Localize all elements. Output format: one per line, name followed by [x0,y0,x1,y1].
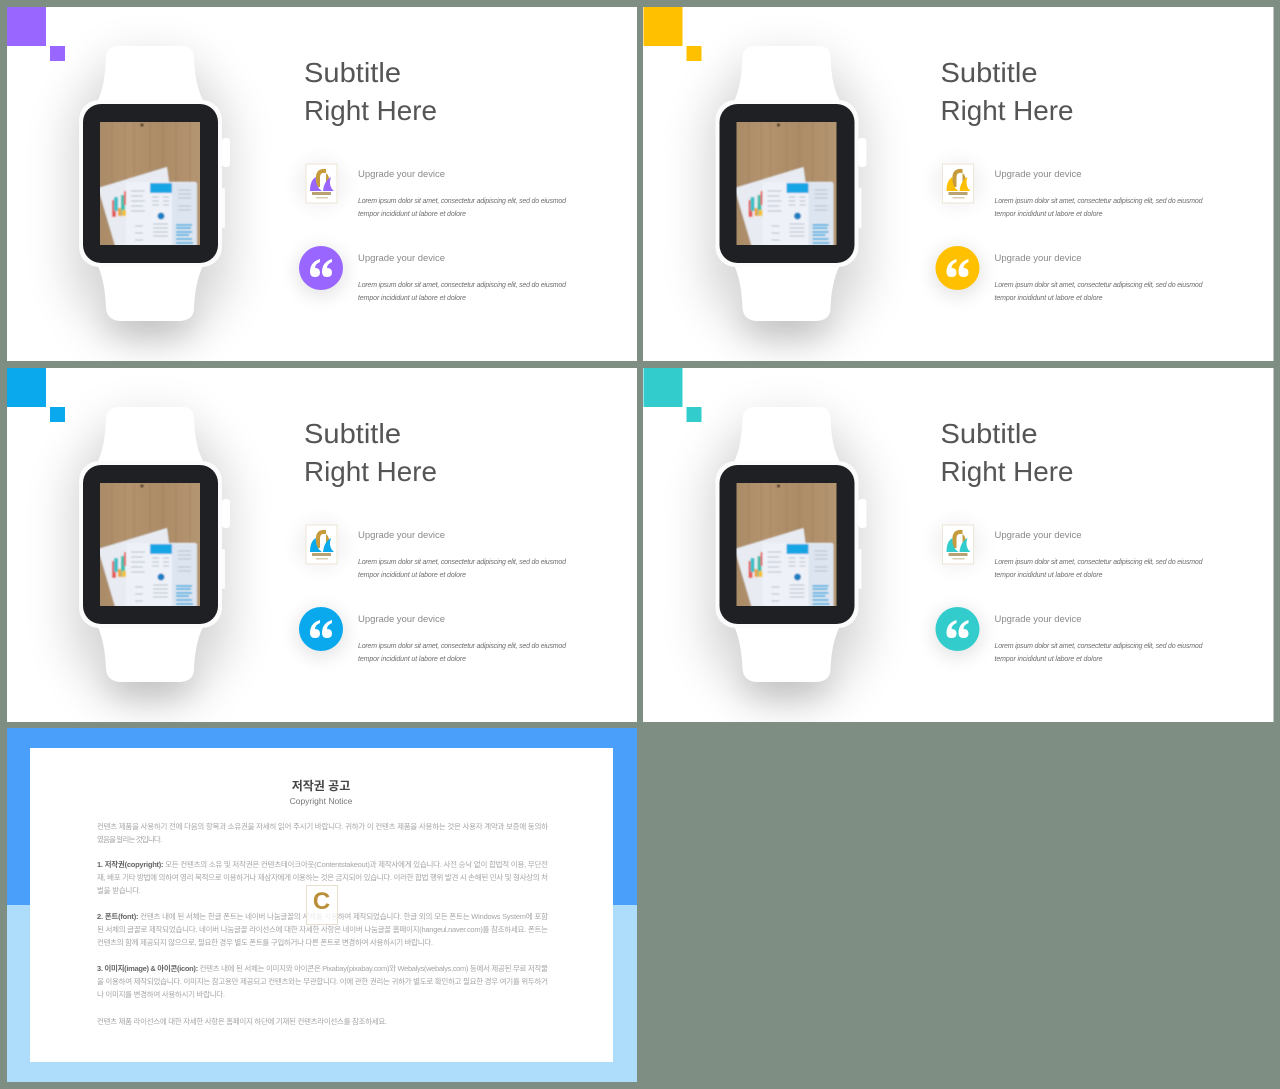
feature text 1 [358,530,567,579]
intro text [97,821,548,844]
intro text: 컨텐츠 제품을 사용하기 전에 다음의 항목과 소유권을 자세히 읽어 주시기 바랍니다. 귀하가 이 컨텐츠 제품을 사용하는 것은 사용자 계약과 보증에 동의하 [97,821,548,831]
icon: logo badge [306,164,337,203]
feature text 1: Lorem ipsum dolor sit amet, consectetur adipiscing elit, sed do eiusmod [358,198,567,205]
icon: gold C logo: C [313,888,330,915]
feature text 1 [994,169,1204,218]
heading: Subtitle [940,57,1038,88]
feature text 1: Upgrade your device [358,530,445,541]
icon: logo badge [942,525,974,564]
feature text 2: tempor incididunt ut labore et dolore [358,295,466,302]
heading [304,418,437,487]
icon: quote circle [936,607,980,651]
heading: Subtitle [940,418,1038,449]
feature text 1: Lorem ipsum dolor sit amet, consectetur adipiscing elit, sed do eiusmod [994,559,1204,566]
feature text 2 [994,253,1204,302]
panel: copyright notice [7,728,637,1082]
copyright title: 저작권 공고 [292,778,350,793]
icon: gold C logo [306,886,338,924]
accent squares [7,368,65,422]
icon: quote circle [936,246,980,290]
section 1 [97,859,548,895]
heading: Subtitle [304,57,401,88]
intro text: 였음을 알리는 것입니다. [97,834,162,844]
section 3 [97,963,548,999]
feature text 1: Upgrade your device [994,169,1082,180]
section 2: 된 서체의 글꼴로 제작되었습니다. 네이버 나눔글꼴 라이선스에 대한 자세한 사항은 네이버 나눔글꼴 홈페이지(hangeul.naver.com)를 참조하세요. 폰트는 [97,924,548,934]
feature text 2: Upgrade your device [358,253,445,264]
heading: Subtitle [304,418,401,449]
panel: purple slide [7,7,637,361]
section 2 [97,911,548,947]
feature text 2: tempor incididunt ut labore et dolore [994,656,1103,663]
icon: quote circle [299,607,343,651]
feature text 2: tempor incididunt ut labore et dolore [994,295,1103,302]
feature text 2: Upgrade your device [994,614,1082,625]
feature text 2: Lorem ipsum dolor sit amet, consectetur adipiscing elit, sed do eiusmod [994,643,1204,650]
feature text 2 [994,614,1204,663]
heading: Right Here [304,456,437,487]
icon: logo badge [942,164,974,203]
feature text 1: tempor incididunt ut labore et dolore [994,572,1103,579]
feature text 2: Lorem ipsum dolor sit amet, consectetur adipiscing elit, sed do eiusmod [994,282,1204,289]
heading: Right Here [304,95,437,126]
accent squares [7,7,65,61]
heading [304,57,437,126]
feature text 1: tempor incididunt ut labore et dolore [358,572,466,579]
feature text 1: tempor incididunt ut labore et dolore [994,211,1103,218]
section 1: 벌을 받습니다. [97,885,141,895]
feature text 1 [358,169,567,218]
section 2: 컨텐츠의 함께 제공되지 않으므로, 필요한 경우 별도 폰트를 구입하거나 다른 폰트로 변경하여 사용하시기 바랍니다. [97,937,433,947]
feature text 2: Lorem ipsum dolor sit amet, consectetur adipiscing elit, sed do eiusmod [358,282,567,289]
heading [940,57,1074,126]
feature text 2: Upgrade your device [994,253,1082,264]
feature text 2: Upgrade your device [358,614,445,625]
section 3: 3. 이미지(image) & 아이콘(icon): 컨텐츠 내에 된 서체는 이미지와 아이콘은 Pixabay(pixabay.com)와 Webalys(webalys.com) 등에서 제공된 무료 저작물 [97,963,548,973]
feature text 1: Lorem ipsum dolor sit amet, consectetur adipiscing elit, sed do eiusmod [358,559,567,566]
section 3: 나 이미지를 변경하여 사용하시기 바랍니다. [97,989,225,999]
feature text 1 [994,530,1204,579]
panel: yellow slide [643,7,1274,361]
feature text 1: tempor incididunt ut labore et dolore [358,211,466,218]
feature text 1: Lorem ipsum dolor sit amet, consectetur adipiscing elit, sed do eiusmod [994,198,1204,205]
section 1: 재, 배포 기타 방법에 의하여 영리 목적으로 이용하거나 제삼자에게 이용하는 것은 금지되어 있습니다. 이러한 합법 행위 발견 시 손해된 민사 및 형사상의 처 [97,872,548,882]
feature text 2 [358,614,567,663]
closing line: 컨텐츠 제품 라이선스에 대한 자세한 사항은 홈페이지 하단에 기재된 컨텐츠라이선스를 참조하세요. [97,1016,387,1026]
section 2: 2. 폰트(font): 컨텐츠 내에 된 서체는 한글 폰트는 네이버 나눔글꼴의 서체를 사용하여 제작되었습니다. 한글 외의 모든 폰트는 Windows System에 포함 [97,911,548,921]
feature text 1: Upgrade your device [994,530,1082,541]
copyright title [290,778,353,806]
section 1: 1. 저작권(copyright): 모든 컨텐츠의 소유 및 저작권은 컨텐츠테이크아웃(Contentstakeout)과 제작사에게 있습니다. 사전 승낙 없이 합법적 이용, 무단전 [97,859,548,869]
heading: Right Here [940,456,1074,487]
panel: teal slide [643,368,1274,722]
feature text 1: Upgrade your device [358,169,445,180]
feature text 2 [358,253,567,302]
accent squares [644,368,702,422]
icon: quote circle [299,246,343,290]
panel: blue slide [7,368,637,722]
icon: logo badge [306,525,337,564]
heading [940,418,1074,487]
section 3: 을 이용하여 제작되었습니다. 이미지는 참고용만 제공되고 컨텐츠와는 무관합니다. 이에 관한 권리는 귀하가 별도로 확인하고 필요한 경우 여기를 위두하거 [97,976,548,986]
heading: Right Here [940,95,1074,126]
accent squares [644,7,702,61]
copyright title: Copyright Notice [290,796,353,806]
feature text 2: Lorem ipsum dolor sit amet, consectetur adipiscing elit, sed do eiusmod [358,643,567,650]
feature text 2: tempor incididunt ut labore et dolore [358,656,466,663]
